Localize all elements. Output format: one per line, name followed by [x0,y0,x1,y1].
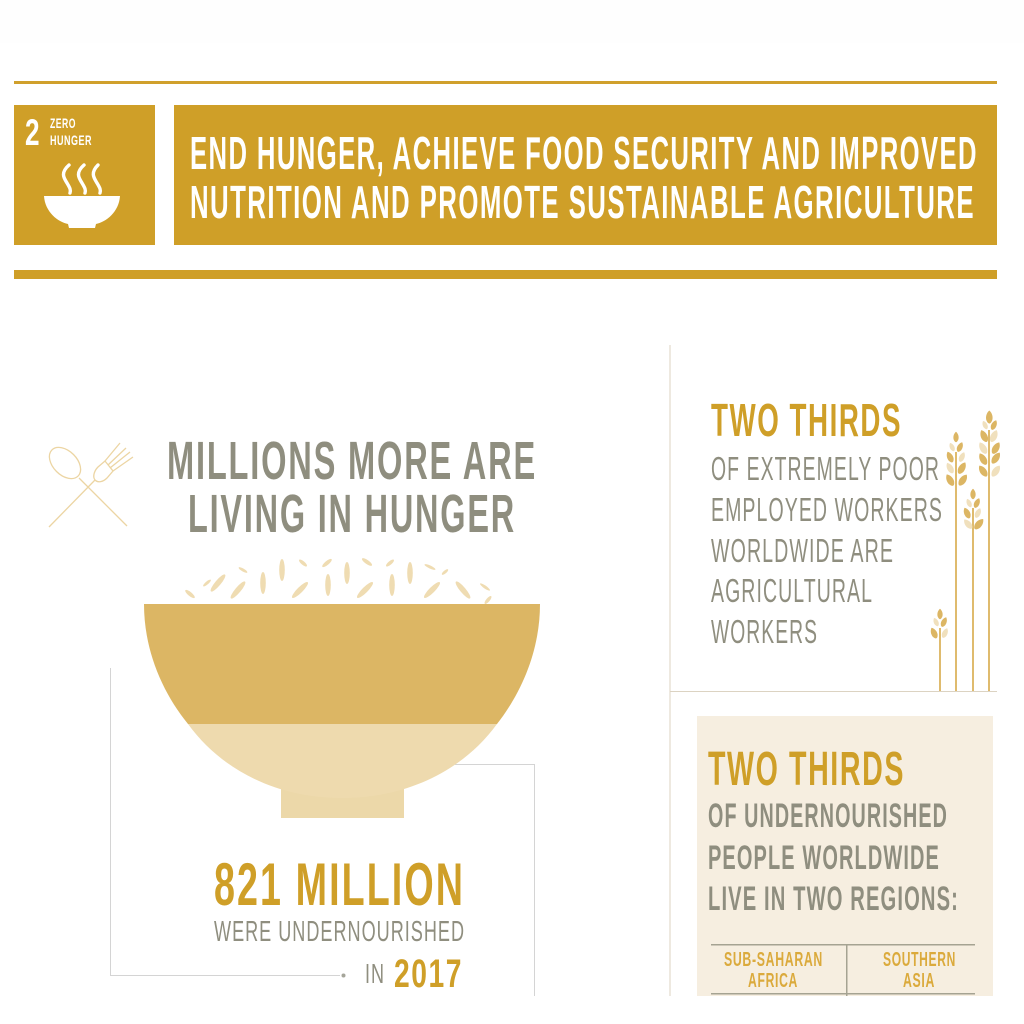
panel: workers text [711,394,943,650]
bowl foot [281,780,404,818]
heading: millions more: MILLIONS MORE ARE [167,431,537,491]
bowl lower share [188,724,497,798]
year [365,952,463,996]
table cell: southern asia: ASIA [903,970,935,992]
thick rule [14,270,997,279]
rice grains [184,557,493,605]
title text [190,127,978,228]
panel: undernourished regions [697,716,993,996]
big number: 821 MILLION [214,851,465,918]
statistic caption: WERE UNDERNOURISHED [214,916,465,948]
goal 2 badge [14,105,155,245]
goal name: HUNGER [50,132,92,148]
regions body [708,797,959,918]
table cell: southern asia [883,949,956,992]
bowl upper share [144,604,540,724]
icon: crossed spoon and fork [43,441,133,527]
icon: wheat stalks [929,410,1002,691]
table cell: southern asia: SOUTHERN [883,949,956,971]
year: 2017 [394,952,463,996]
workers heading: TWO THIRDS [711,394,902,446]
callout dot [342,974,346,978]
workers body: WORLDWIDE ARE [711,532,894,569]
statistic: 821 million [214,851,465,996]
icon: bowl with steam [44,165,120,228]
workers body: AGRICULTURAL [711,572,873,609]
bowl chart [144,604,540,818]
workers body: WORKERS [711,613,818,650]
workers body [711,450,943,650]
table cell: sub-saharan africa: AFRICA [748,970,798,992]
goal name [50,115,92,148]
year: IN [365,958,385,989]
heading: millions more [167,431,537,544]
goal name: ZERO [50,115,76,131]
callout frame lines [110,668,534,996]
title banner [174,105,997,245]
table cell: sub-saharan africa: SUB-SAHARAN [724,949,823,971]
right column dividers [670,345,997,996]
heading: millions more: LIVING IN HUNGER [188,484,516,544]
top rule [14,81,997,84]
regions table [711,944,975,996]
table cell: sub-saharan africa [724,949,823,992]
goal number: 2 [25,112,41,153]
